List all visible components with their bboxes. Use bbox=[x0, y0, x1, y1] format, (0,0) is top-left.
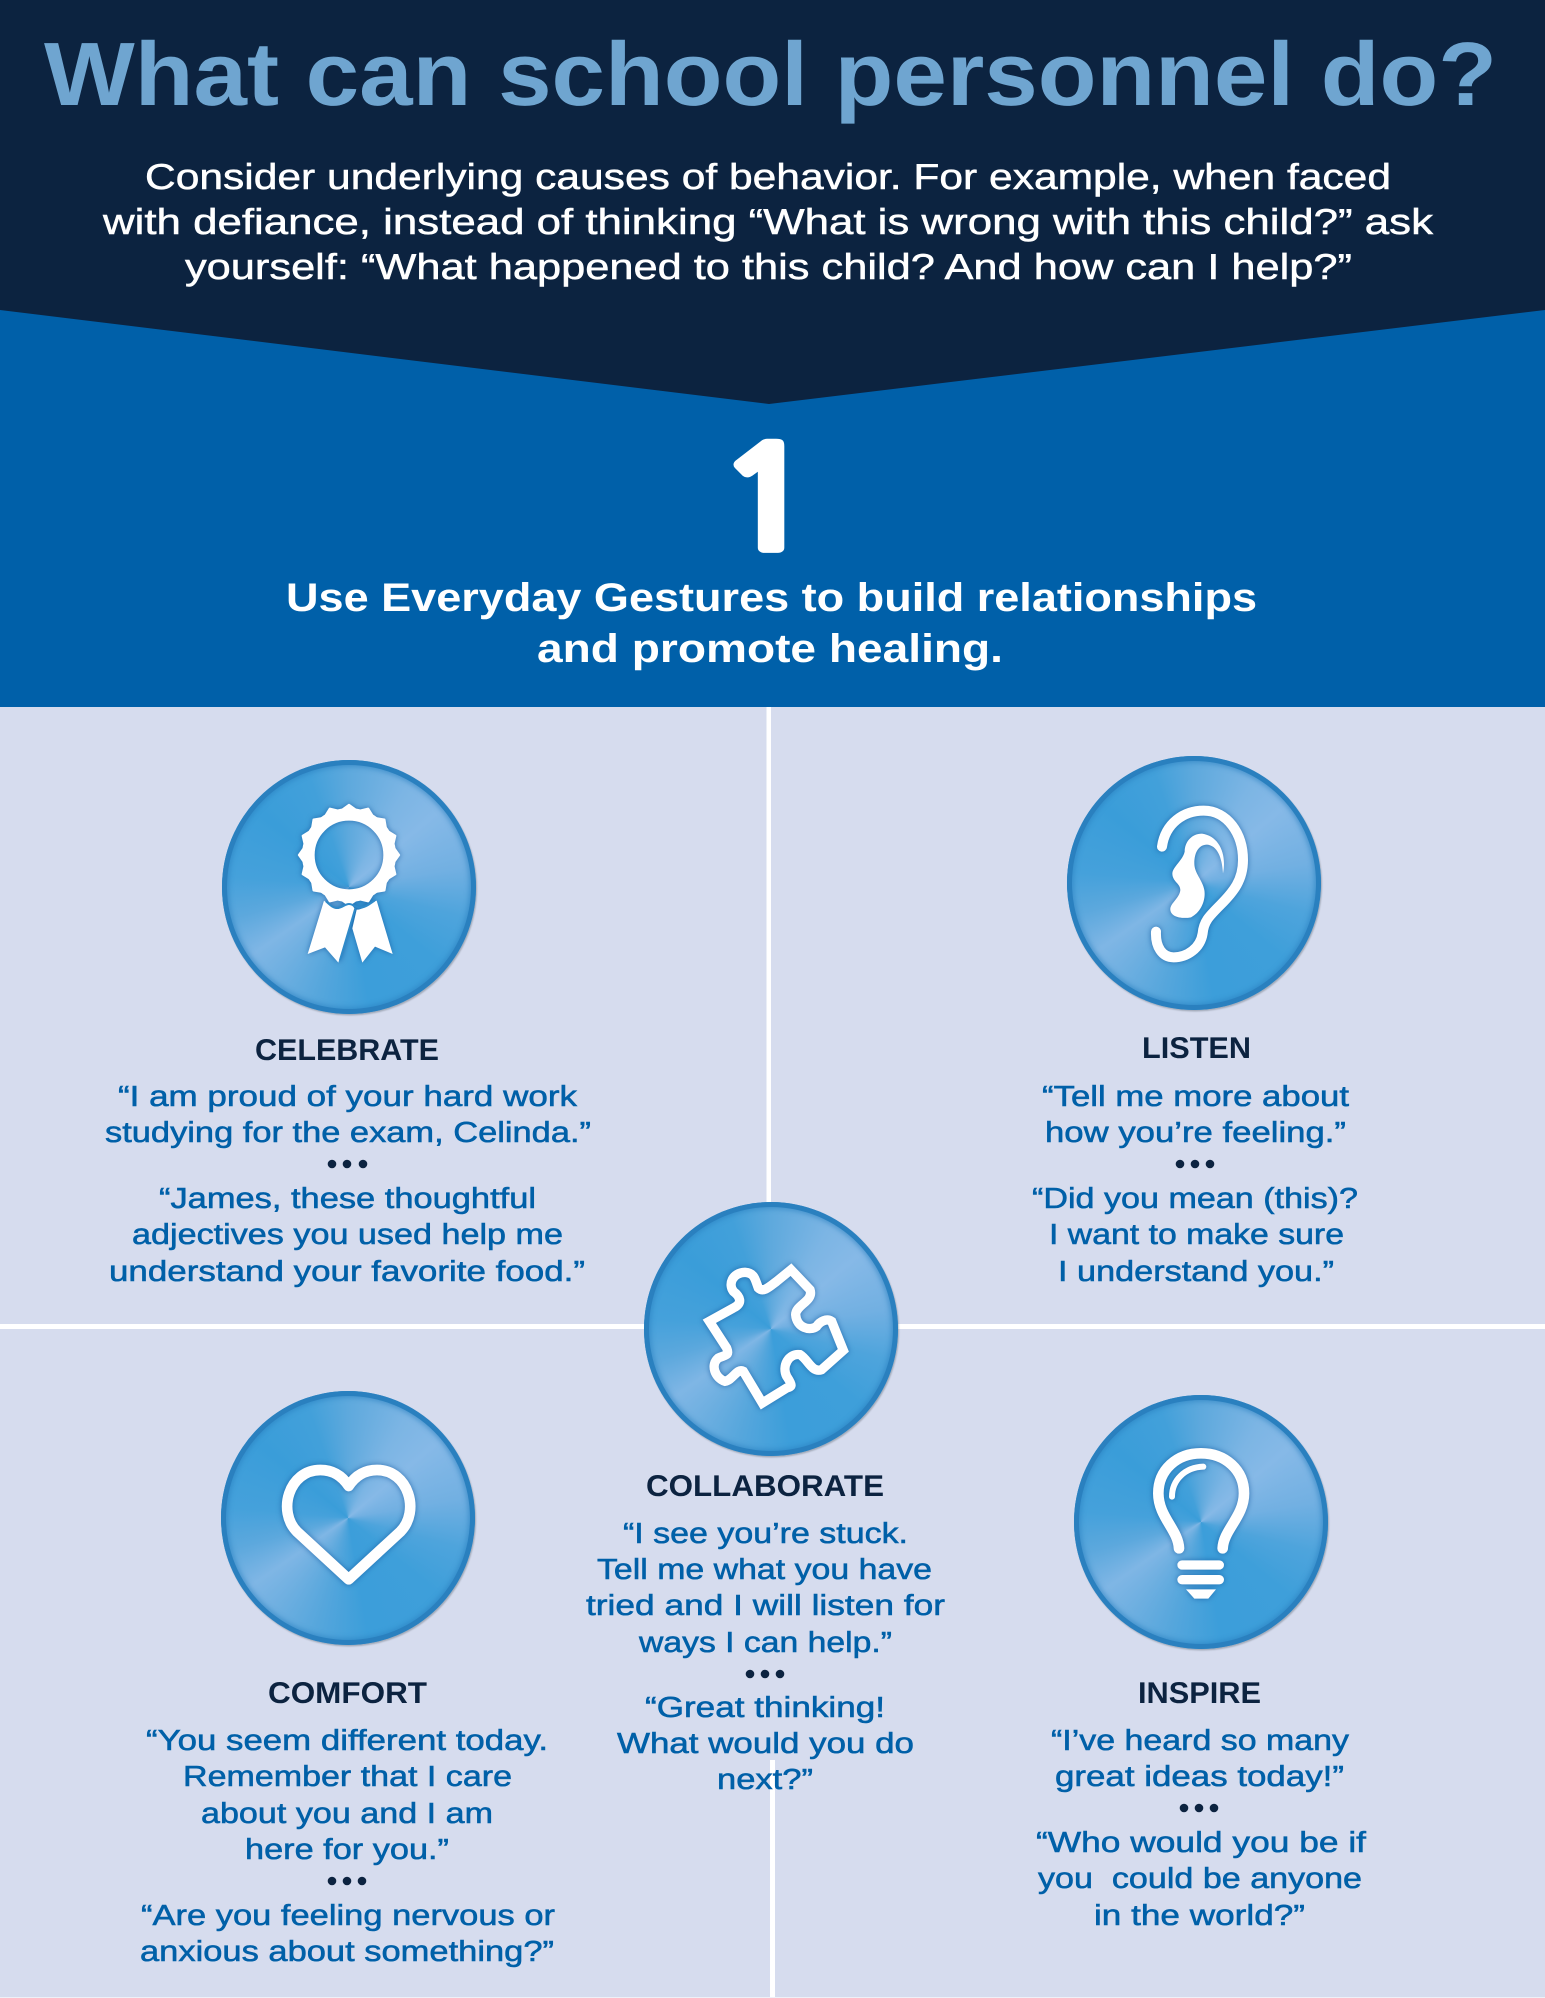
step number: 1 bbox=[716, 431, 819, 571]
text block: comfort: Remember that I care bbox=[183, 1761, 512, 1793]
text block: inspire: great ideas today!” bbox=[1055, 1761, 1344, 1793]
text block: celebrate: understand your favorite food.” bbox=[109, 1256, 585, 1288]
text block: comfort: COMFORT bbox=[268, 1677, 427, 1710]
icon: listen ear bbox=[1067, 756, 1321, 1010]
text block: celebrate: CELEBRATE bbox=[255, 1034, 439, 1067]
panel: blue heading band bbox=[0, 300, 1545, 707]
step heading: and promote healing. bbox=[537, 627, 1003, 671]
text block: inspire: in the world?” bbox=[1094, 1900, 1305, 1932]
text block: collaborate: tried and I will listen for bbox=[586, 1590, 945, 1622]
text block: collaborate: next?” bbox=[717, 1764, 813, 1796]
text block: listen: I understand you.” bbox=[1058, 1256, 1334, 1288]
intro paragraph: yourself: “What happened to this child? And how can I help?” bbox=[185, 246, 1352, 287]
text block: inspire bbox=[1036, 1677, 1367, 1932]
text block: comfort: about you and I am bbox=[201, 1798, 493, 1830]
text block: listen: LISTEN bbox=[1142, 1032, 1251, 1065]
intro paragraph: with defiance, instead of thinking “What is wrong with this child?” ask bbox=[102, 201, 1434, 242]
text block: collaborate: What would you do bbox=[617, 1728, 914, 1760]
text block: collaborate: “Great thinking! bbox=[645, 1692, 885, 1724]
text block: comfort: anxious about something?” bbox=[140, 1936, 554, 1968]
text block: listen: how you’re feeling.” bbox=[1045, 1117, 1346, 1149]
title: What can school personnel do? bbox=[44, 25, 1497, 125]
step heading: Use Everyday Gestures to build relationships bbox=[286, 576, 1257, 620]
text block: collaborate: COLLABORATE bbox=[646, 1470, 884, 1503]
icon: collaborate puzzle piece bbox=[644, 1202, 898, 1456]
text block: inspire: “I’ve heard so many bbox=[1051, 1725, 1350, 1757]
text block: listen: “Did you mean (this)? bbox=[1032, 1183, 1358, 1215]
text block: celebrate bbox=[105, 1034, 591, 1288]
text block: listen: I want to make sure bbox=[1049, 1219, 1344, 1251]
text block: inspire: “Who would you be if bbox=[1036, 1827, 1367, 1859]
text block: comfort: “You seem different today. bbox=[146, 1725, 548, 1757]
intro paragraph: Consider underlying causes of behavior. For example, when faced bbox=[145, 156, 1391, 197]
text block: listen bbox=[1032, 1032, 1358, 1288]
step heading bbox=[286, 576, 1257, 671]
text block: celebrate: studying for the exam, Celinda.” bbox=[105, 1117, 591, 1149]
text block: collaborate: ways I can help.” bbox=[638, 1627, 892, 1659]
icon: celebrate ribbon badge bbox=[222, 760, 476, 1014]
panel: dark header with chevron bbox=[0, 0, 1545, 404]
text block: comfort: “Are you feeling nervous or bbox=[141, 1900, 555, 1932]
text block: listen: “Tell me more about bbox=[1042, 1081, 1349, 1113]
icon: comfort heart bbox=[221, 1391, 475, 1645]
icon: inspire light bulb bbox=[1074, 1395, 1328, 1649]
text block: comfort: here for you.” bbox=[245, 1834, 449, 1866]
text block: collaborate: Tell me what you have bbox=[597, 1554, 932, 1586]
intro paragraph bbox=[102, 156, 1434, 287]
text block: inspire: INSPIRE bbox=[1138, 1677, 1261, 1710]
text block: celebrate: adjectives you used help me bbox=[132, 1219, 563, 1251]
text block: celebrate: “I am proud of your hard work bbox=[118, 1081, 578, 1113]
text block: celebrate: “James, these thoughtful bbox=[159, 1183, 536, 1215]
text block: comfort bbox=[140, 1677, 555, 1968]
text block: collaborate: “I see you’re stuck. bbox=[623, 1518, 908, 1550]
text block: inspire: you could be anyone bbox=[1038, 1863, 1362, 1895]
text block: collaborate bbox=[586, 1470, 945, 1796]
